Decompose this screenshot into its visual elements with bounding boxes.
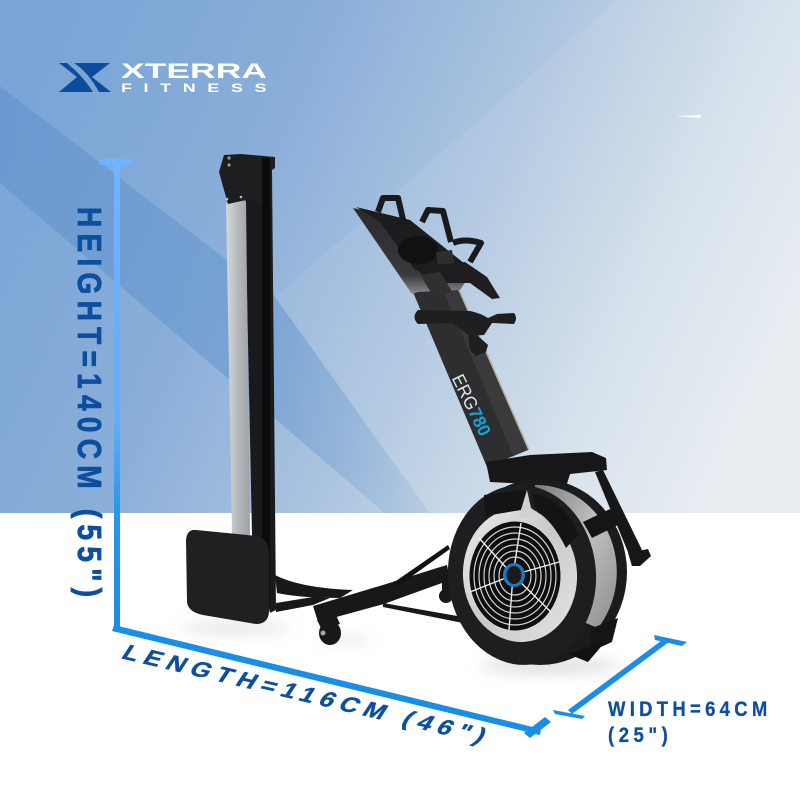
rower: base frame — [275, 545, 463, 645]
foot cup — [398, 236, 438, 264]
rower: main beam with chain — [410, 285, 529, 467]
rower: upper bracket and support arm — [486, 452, 651, 566]
height dimension line — [100, 159, 133, 630]
rower: handle bar — [414, 310, 516, 356]
foot strap loops — [378, 198, 481, 262]
rear cross legs — [275, 575, 353, 598]
width label: (25") — [608, 724, 668, 747]
width label: WIDTH=64CM — [608, 698, 767, 721]
black top covers — [484, 490, 526, 516]
strap block — [415, 262, 500, 299]
floor — [0, 513, 800, 800]
main base beam — [313, 565, 452, 622]
front small caster — [439, 589, 453, 603]
top bracket — [219, 154, 275, 205]
rower: footplate with straps — [353, 198, 500, 299]
strap clips — [583, 509, 620, 538]
logo wordmark XTERRA: XTERRA — [121, 60, 267, 83]
black column — [245, 170, 276, 613]
central strap — [436, 250, 457, 281]
logo wordmark FITNESS: FITNESS — [121, 82, 266, 95]
hub — [503, 563, 525, 587]
model name ERG780: ERG780 — [448, 371, 495, 439]
silver ring — [458, 504, 582, 646]
black front face — [442, 480, 602, 670]
heel plate — [420, 272, 453, 294]
width dimension line — [553, 635, 687, 719]
height label: HEIGHT=140CM (55") — [70, 207, 107, 597]
drum body — [453, 479, 627, 665]
floor shadows — [180, 623, 620, 674]
silver drum band — [530, 485, 617, 628]
rower: rear upright rail — [219, 154, 276, 613]
rower: flywheel — [442, 479, 627, 670]
logo: Xterra Fitness — [59, 60, 267, 95]
fan grille — [469, 521, 561, 631]
silver rail — [226, 201, 250, 535]
caster wheel — [317, 615, 341, 645]
wall background — [0, 0, 800, 513]
brace to flywheel — [393, 545, 450, 586]
length dimension line — [112, 625, 551, 738]
rower: seat — [186, 530, 269, 624]
icon: X mark — [59, 63, 111, 92]
pointer tab — [519, 490, 538, 519]
width label — [608, 698, 767, 747]
length label: LENGTH=116CM (46") — [117, 641, 491, 748]
